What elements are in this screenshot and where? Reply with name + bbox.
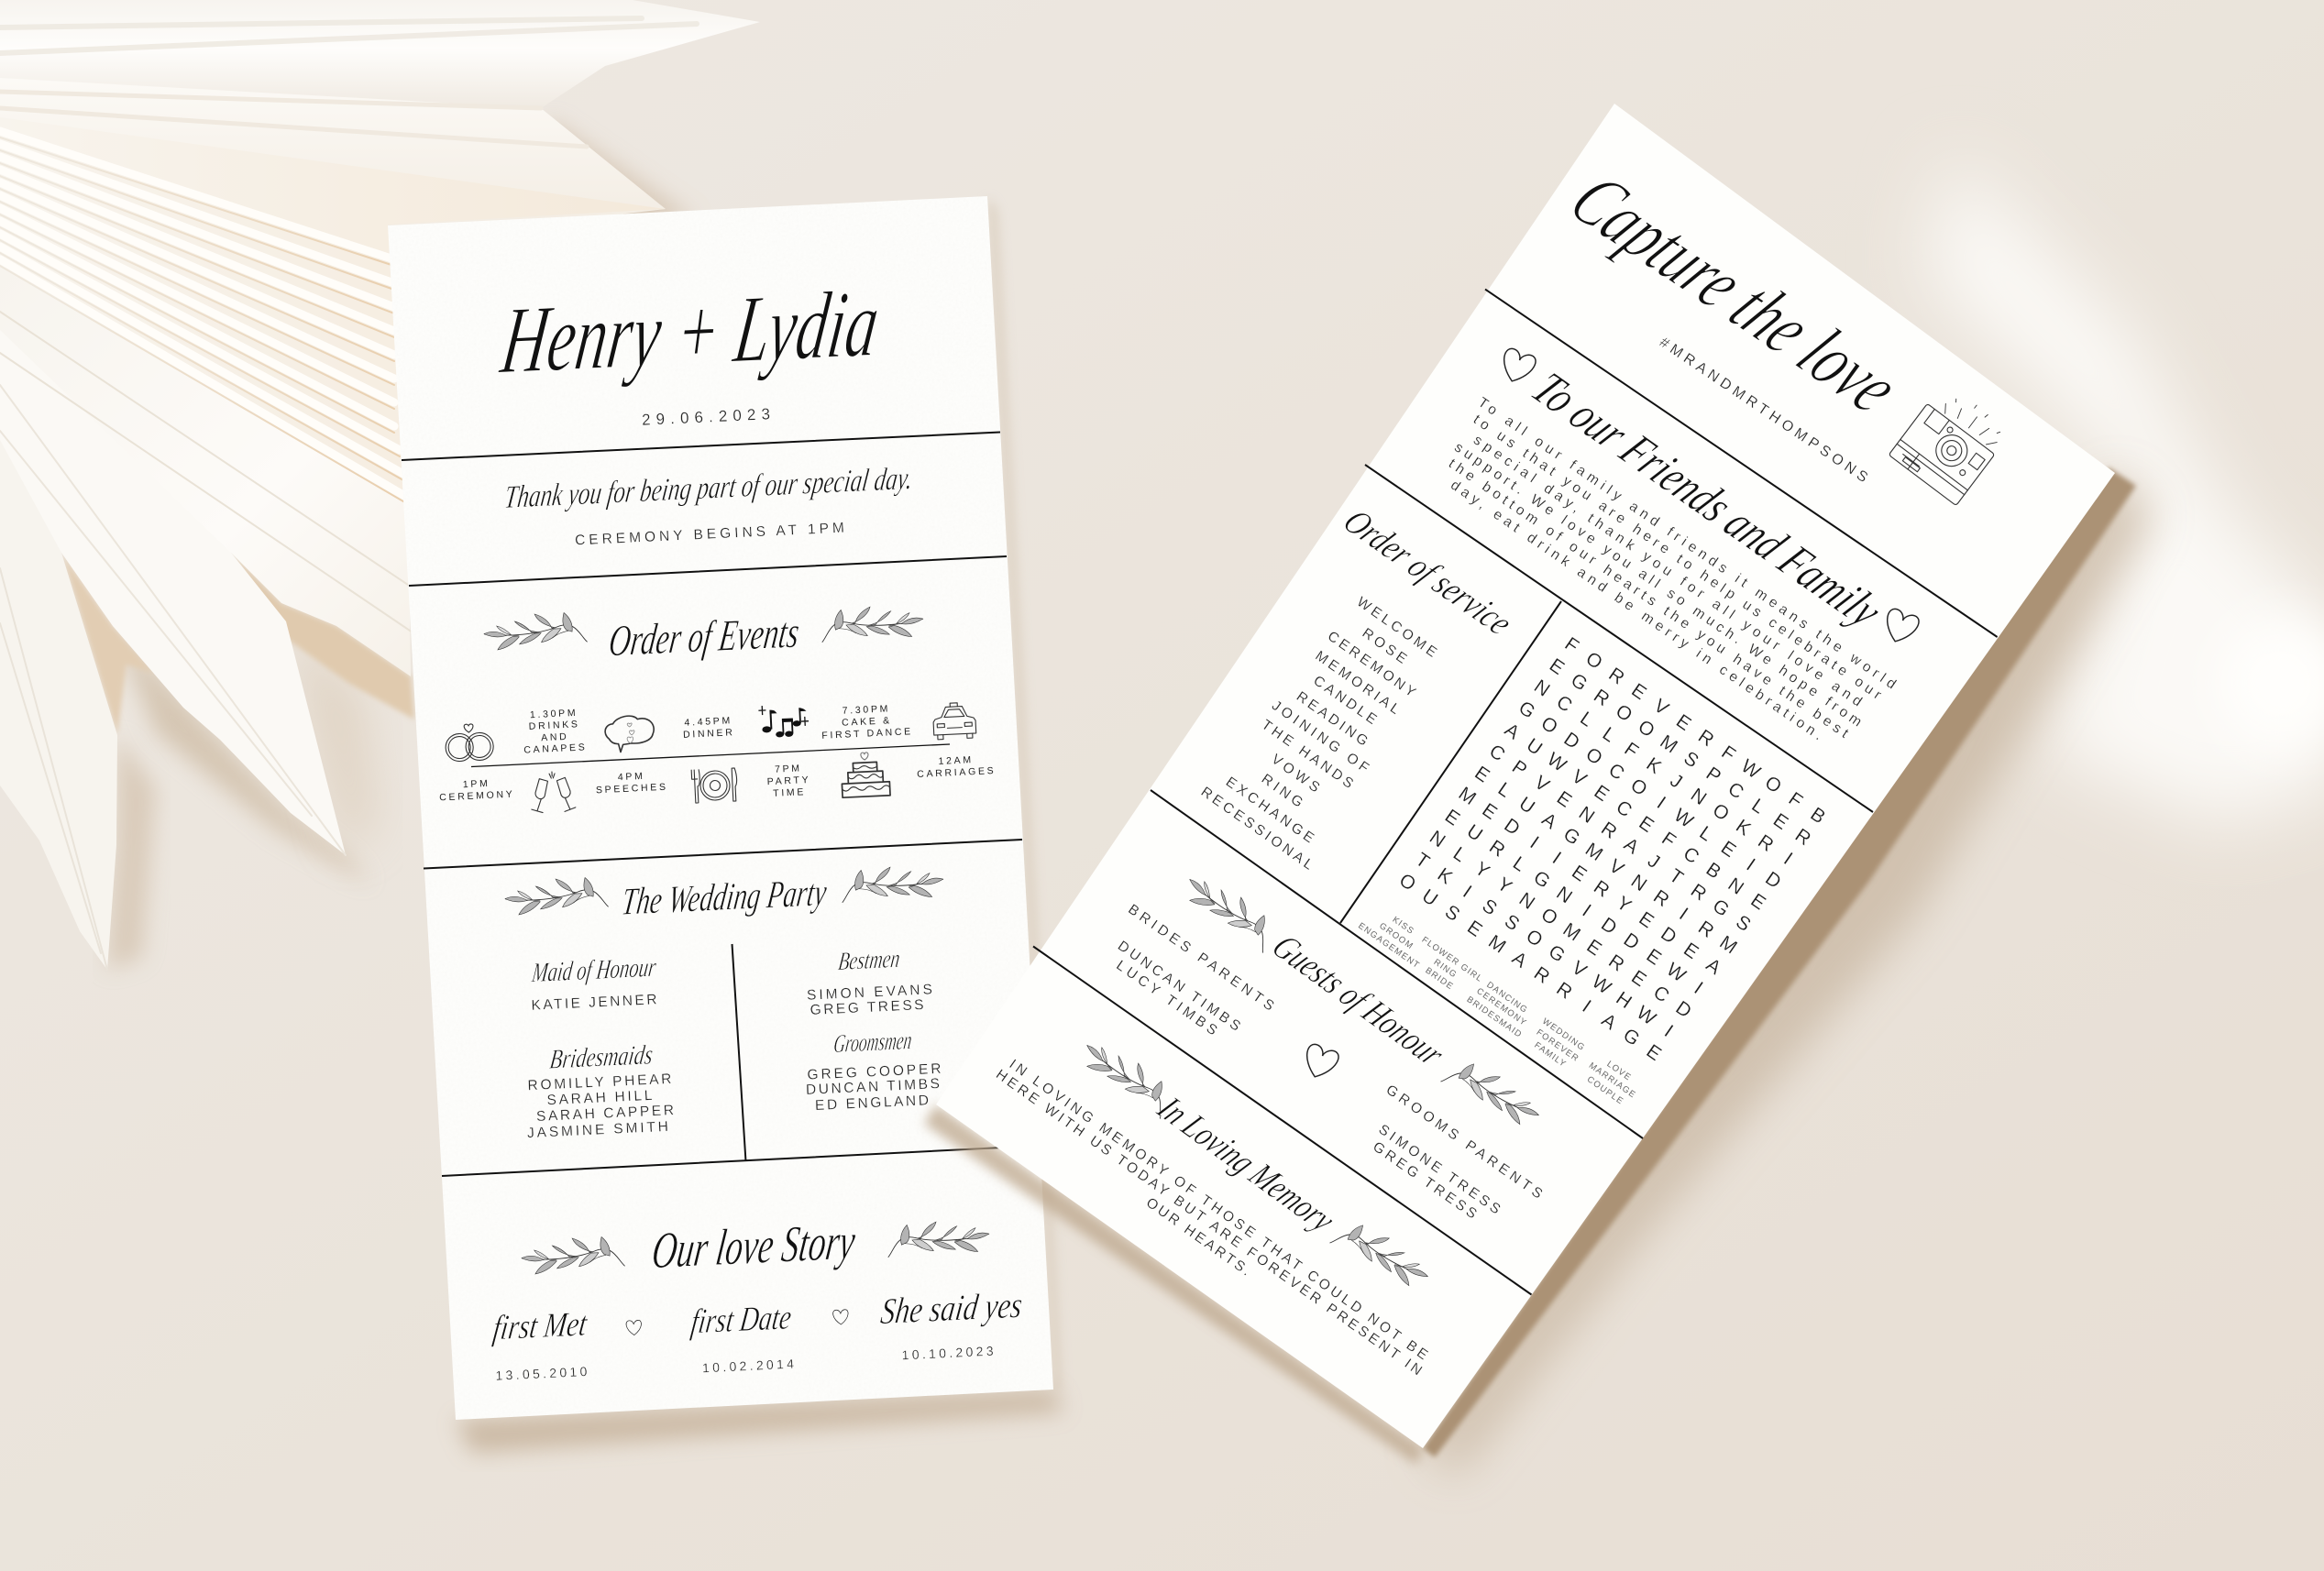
grooms parents names: SIMONE TRESS bbox=[1375, 1122, 1503, 1217]
groomsmen names: GREG COOPER bbox=[807, 1061, 942, 1083]
icon: heart bbox=[1300, 1042, 1340, 1082]
brides parents names: LUCY TIMBS bbox=[1113, 958, 1220, 1038]
bridesmaid names: SARAH CAPPER bbox=[536, 1103, 674, 1125]
service list: JOINING OF bbox=[1269, 698, 1371, 776]
sprig left bbox=[1077, 1032, 1179, 1122]
welcome message: special day, thank you for all your love and bbox=[1470, 433, 1865, 709]
sprig right bbox=[839, 862, 945, 906]
welcome message: to us that you are here to help us celebrate our bbox=[1470, 412, 1884, 703]
time: party time: PARTY bbox=[766, 775, 811, 787]
panel: programme card right bbox=[936, 104, 2115, 1448]
brides parents names: DUNCAN TIMBS bbox=[1115, 938, 1243, 1035]
icon: wedding cake bbox=[841, 752, 890, 797]
icon: instant camera bbox=[1889, 381, 2011, 506]
time: dinner: 4.45PM bbox=[684, 715, 732, 729]
service list: RECESSIONAL bbox=[1198, 784, 1316, 873]
icon: music notes bbox=[758, 704, 810, 738]
word search clue list: GROOM bbox=[1377, 921, 1415, 951]
section: order of events bbox=[438, 601, 997, 813]
time: speeches: 4PM bbox=[618, 771, 645, 783]
bridesmaids: Bridesmaids bbox=[548, 1038, 655, 1075]
bridesmaid names bbox=[527, 1071, 674, 1141]
card sheet bbox=[936, 104, 2115, 1448]
section dividers bbox=[1033, 290, 1998, 1295]
word search clue list: FAMILY bbox=[1532, 1040, 1569, 1070]
word search clue list: MARRIAGE bbox=[1587, 1060, 1638, 1101]
she said yes: She said yes bbox=[878, 1284, 1025, 1332]
word search clue list: DANCING bbox=[1484, 980, 1530, 1016]
brides parents: BRIDES PARENTS bbox=[1125, 902, 1277, 1014]
time: carriages: 12AM bbox=[938, 754, 974, 767]
memorial text: IN LOVING MEMORY OF THOSE THAT COULD NOT BE bbox=[1007, 1057, 1430, 1363]
time: party time bbox=[766, 763, 811, 799]
grooms parents: GROOMS PARENTS bbox=[1383, 1082, 1545, 1202]
icon: car bbox=[932, 702, 976, 740]
service list: THE HANDS bbox=[1259, 717, 1356, 792]
word search clue list: BRIDESMAID bbox=[1465, 994, 1524, 1040]
order of service bbox=[1198, 502, 1522, 873]
section: in loving memory bbox=[993, 1032, 1436, 1379]
date: first met: 13.05.2010 bbox=[495, 1364, 588, 1383]
time: dinner bbox=[682, 715, 735, 741]
grooms parents names: GREG TRESS bbox=[1370, 1139, 1480, 1222]
time: drinks and canapes: AND bbox=[541, 731, 569, 743]
service list: VOWS bbox=[1269, 752, 1322, 796]
bestmen names: GREG TRESS bbox=[810, 997, 924, 1018]
word search clue list: FLOWER GIRL bbox=[1420, 935, 1484, 984]
section dividers bbox=[402, 433, 1039, 1176]
section: guests of honour bbox=[1113, 866, 1547, 1222]
word search clue list: CEREMONY bbox=[1474, 986, 1529, 1028]
word search grid: EURLGNIDDEWI bbox=[1441, 806, 1707, 998]
time: cake and first dance bbox=[821, 702, 913, 742]
sprig right bbox=[1439, 1054, 1547, 1130]
time: ceremony: CEREMONY bbox=[439, 789, 515, 803]
shadow: right card bbox=[924, 467, 2154, 1476]
word search clue list: WEDDING bbox=[1540, 1016, 1587, 1053]
section: our love story bbox=[490, 1214, 1025, 1383]
time: speeches bbox=[595, 770, 668, 796]
word search grid: FOREVERFWOFB bbox=[1560, 633, 1829, 828]
bridesmaid names: SARAH HILL bbox=[546, 1088, 653, 1108]
first date: first Date bbox=[688, 1298, 794, 1342]
icon: plate and cutlery bbox=[691, 768, 738, 803]
time: ceremony bbox=[438, 777, 515, 803]
service list: READING bbox=[1294, 688, 1371, 750]
word search clue list: COUPLE bbox=[1585, 1074, 1625, 1107]
welcome message: support. We love you all so much. We hope from bbox=[1451, 439, 1865, 731]
time: speeches: SPEECHES bbox=[596, 782, 668, 796]
thank you message: Thank you for being part of our special day. bbox=[502, 460, 915, 515]
word search clue list: LOVE bbox=[1604, 1059, 1634, 1083]
welcome message: day, eat drink and be merry in celebration. bbox=[1448, 478, 1825, 743]
heading: our love story: Our love Story bbox=[649, 1214, 859, 1280]
time: cake and first dance: FIRST DANCE bbox=[821, 726, 913, 742]
service list: CANDLE bbox=[1310, 673, 1380, 728]
service list: ROSE bbox=[1360, 625, 1409, 667]
service list: RING bbox=[1259, 771, 1305, 811]
word search grid: TKISSOGVWHWI bbox=[1412, 849, 1677, 1041]
maid of honour: Maid of Honour bbox=[530, 951, 658, 988]
time: drinks and canapes: DRINKS bbox=[529, 719, 580, 732]
time: carriages bbox=[916, 753, 997, 780]
date: she said yes: 10.10.2023 bbox=[901, 1344, 994, 1362]
time: party time: TIME bbox=[773, 786, 806, 799]
word search grid: CPVENRAJTRGS bbox=[1485, 741, 1755, 936]
word search grid: EGROOMSPCLER bbox=[1546, 654, 1814, 850]
icon: heart bbox=[832, 1310, 849, 1324]
word search grid: AUWVECEFCBNE bbox=[1501, 720, 1769, 914]
word search clue list: RING bbox=[1432, 957, 1459, 981]
word search grid bbox=[1394, 632, 1831, 1066]
time: drinks and canapes: 1.30PM bbox=[530, 708, 578, 720]
ceremony time: CEREMONY BEGINS AT 1PM bbox=[575, 521, 844, 548]
heading: couple names: Henry + Lydia bbox=[494, 269, 885, 394]
word search grid: OUSEMARRIAGE bbox=[1395, 870, 1665, 1065]
icon: champagne glasses bbox=[530, 771, 576, 813]
icon: heart bbox=[1497, 346, 1537, 387]
word search grid: ELUAGMVNRIRM bbox=[1470, 763, 1741, 958]
time: cake and first dance: CAKE & bbox=[842, 715, 892, 729]
shadow: left card bbox=[456, 196, 1063, 1453]
heading: capture the love: Capture the love bbox=[1553, 159, 1918, 428]
service list: MEMORIAL bbox=[1312, 648, 1403, 718]
memorial text: OUR HEARTS. bbox=[1143, 1195, 1253, 1280]
bestmen names bbox=[807, 982, 932, 1018]
word search clue list: KISS bbox=[1391, 915, 1416, 937]
word search grid: NCLLFKJNOKRI bbox=[1530, 676, 1796, 869]
groomsmen: Groomsmen bbox=[832, 1027, 913, 1059]
groomsmen names bbox=[806, 1061, 942, 1114]
time: carriages: CARRIAGES bbox=[917, 765, 997, 780]
icon: heart bbox=[1880, 607, 1921, 647]
sprig left bbox=[483, 611, 588, 651]
bestmen names: SIMON EVANS bbox=[807, 982, 932, 1004]
welcome message: To all our family and friends it means the world bbox=[1475, 395, 1899, 692]
sprig right bbox=[819, 601, 925, 646]
panel: programme card left bbox=[388, 196, 1053, 1420]
icon: rings bbox=[445, 723, 494, 762]
word search clue list bbox=[1356, 915, 1638, 1107]
card sheet bbox=[388, 196, 1053, 1420]
welcome message: the bottom of our hearts the you have the best bbox=[1446, 456, 1852, 742]
date: first date: 10.02.2014 bbox=[702, 1357, 795, 1375]
sprig left bbox=[521, 1236, 625, 1275]
time: ceremony: 1PM bbox=[463, 778, 490, 790]
bridesmaid names: JASMINE SMITH bbox=[527, 1119, 668, 1141]
first met: first Met bbox=[490, 1305, 590, 1347]
memorial text: HERE WITH US TODAY BUT ARE FOREVER PRESENT IN bbox=[993, 1067, 1425, 1379]
service list: WELCOME bbox=[1354, 594, 1439, 661]
heading: the wedding party: The Wedding Party bbox=[620, 871, 830, 924]
time: party time: 7PM bbox=[775, 763, 802, 775]
wedding date: 29.06.2023 bbox=[642, 405, 770, 429]
time: drinks and canapes: CANAPES bbox=[523, 742, 588, 756]
time: drinks and canapes bbox=[522, 707, 588, 756]
heading: to our friends and family: To our Friends and Family bbox=[1520, 363, 1894, 636]
word search clue list: ENGAGEMENT bbox=[1356, 921, 1422, 971]
bestmen: Bestmen bbox=[837, 945, 901, 976]
icon: heart bbox=[626, 1320, 642, 1335]
groomsmen names: DUNCAN TIMBS bbox=[806, 1076, 940, 1098]
word search clue list: FOREVER bbox=[1535, 1027, 1581, 1064]
sprig right bbox=[1328, 1215, 1436, 1291]
sprig right bbox=[885, 1216, 991, 1261]
heading: order of events: Order of Events bbox=[606, 609, 802, 665]
service list: CEREMONY bbox=[1325, 629, 1418, 700]
word search grid: MEDIIERYEDEA bbox=[1455, 783, 1724, 979]
groomsmen names: ED ENGLAND bbox=[815, 1093, 929, 1114]
heading: guests of honour: Guests of Honour bbox=[1263, 928, 1454, 1072]
bridesmaid names: ROMILLY PHEAR bbox=[527, 1071, 672, 1093]
palm frond decoration bbox=[0, 0, 760, 970]
name: katie jenner: KATIE JENNER bbox=[531, 992, 657, 1014]
sprig left bbox=[1180, 866, 1282, 956]
heading: order of service: Order of service bbox=[1335, 502, 1522, 642]
sprig left bbox=[504, 876, 609, 916]
service list bbox=[1198, 594, 1439, 873]
section: the wedding party bbox=[504, 862, 945, 1141]
time: cake and first dance: 7.30PM bbox=[842, 703, 890, 717]
hashtag: #MRANDMRTHOMPSONS bbox=[1657, 335, 1870, 486]
time: dinner: DINNER bbox=[683, 727, 735, 741]
heading: in loving memory: In Loving Memory bbox=[1149, 1089, 1345, 1238]
service list: EXCHANGE bbox=[1223, 775, 1316, 846]
word search grid: NLYYNOMERECD bbox=[1426, 827, 1695, 1022]
word search grid: GODOCOIWLEID bbox=[1514, 697, 1785, 893]
word search clue list: BRIDE bbox=[1423, 965, 1456, 993]
icon: speech cloud bbox=[604, 715, 655, 753]
